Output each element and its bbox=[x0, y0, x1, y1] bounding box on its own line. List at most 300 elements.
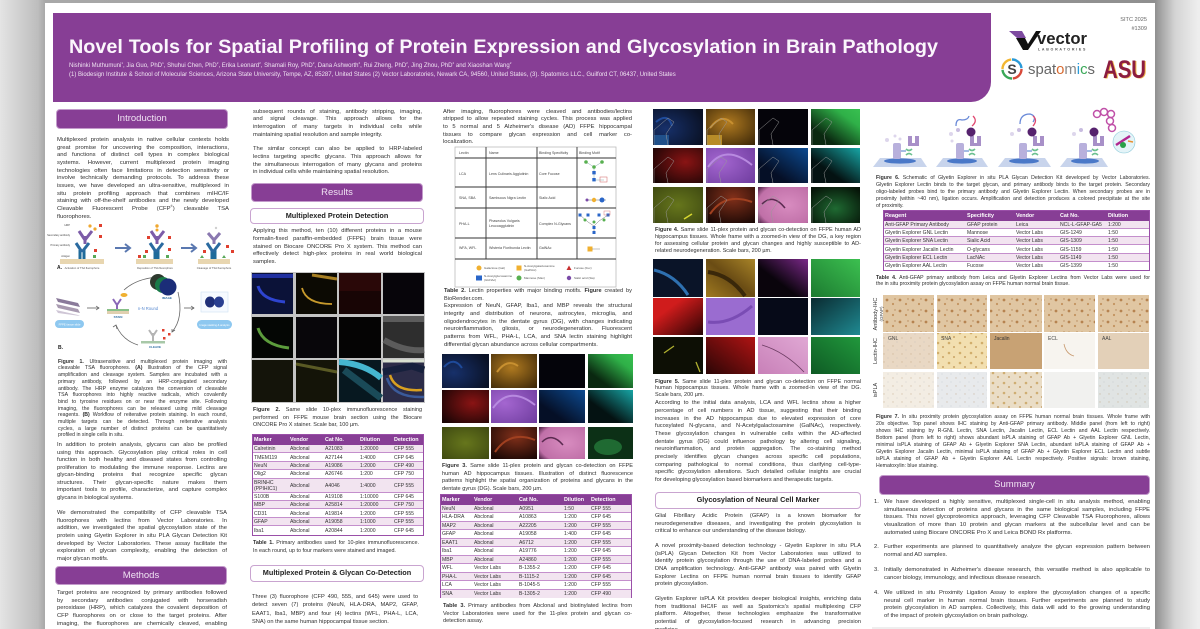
table 3: 11-plex antibodies and lectins: CFP 555 bbox=[591, 523, 611, 529]
table 4: isPLA reagents: Vector Labs bbox=[1016, 255, 1043, 261]
caption: figure 6: Glyetin Explorer Lectin binds to the target glycan, and primary antibody binds to the target protein. Secondary bbox=[876, 182, 1150, 188]
table 2: lectin properties: Sambucus Nigra Lectin bbox=[489, 196, 526, 200]
table 1: 10-plex antibodies: CFP 750 bbox=[394, 502, 414, 508]
table 2: lectin properties: Lens Culinaris Agglutinin bbox=[489, 172, 528, 176]
text: methods continued: subsequent rounds of staining, antibody stripping, imaging, bbox=[253, 108, 422, 114]
table 2: lectin properties: SNA, SBA bbox=[459, 196, 476, 200]
subheading: protein and glycan co-detection: Multiplexed Protein & Glycan Co-Detection bbox=[263, 568, 411, 577]
table 1: 10-plex antibodies: BRINHC bbox=[254, 480, 274, 486]
title: Novel Tools for Spatial Profiling of Protein Expression and Glycosylation in Brain Pathology bbox=[69, 36, 938, 58]
table 4: isPLA reagents: GIS-1309 bbox=[1060, 238, 1082, 244]
text: markers and lectins: integrity and distribution of neurons, astrocytes, microglia, and bbox=[444, 311, 632, 317]
text: introduction: issues, we have developed an ultra-sensitive, multiplexed in bbox=[57, 183, 229, 189]
caption: figure 5: human hippocampus tissues. Whole frame with a zoomed-in view of the DG. bbox=[655, 385, 861, 391]
table 1: 10-plex antibodies: NeuN bbox=[254, 463, 267, 469]
text: methods continued: and signal cleavage. This approach allows for the bbox=[253, 116, 422, 122]
caption: table 4: the in situ proximity protein glycosylation assay on FFPE human normal brain tissue. bbox=[876, 281, 1070, 287]
text: glycan profiling bbox=[57, 442, 227, 501]
row labels bbox=[873, 298, 884, 397]
summary list bbox=[874, 499, 1150, 618]
motif: SNA bbox=[586, 198, 606, 202]
table 3: 11-plex antibodies and lectins: CFP 645 bbox=[591, 531, 611, 537]
text: lectin compatibility: We demonstrated the compatibility of CFP cleavable TSA bbox=[57, 510, 227, 516]
text: data analysis: comparing pathological to normal conditions, thus clarifying cell-type- bbox=[655, 462, 861, 468]
text: co-detection: detect seven (7) proteins (NeuN, HLA-DRA, MAP2, GFAP, bbox=[252, 602, 418, 608]
table 1: 10-plex antibodies: CFP 490 bbox=[394, 463, 414, 469]
table 3: 11-plex antibodies and lectins: A22205 bbox=[519, 523, 537, 529]
table 1: 10-plex antibodies: CFP 645 bbox=[394, 455, 414, 461]
text: proximity detection: identify protein glycosylation through the use of DNA-labeled probes and a bbox=[655, 558, 861, 564]
table 1: 10-plex antibodies: S100B bbox=[254, 494, 269, 500]
table 3: 11-plex antibodies and lectins: A0951 bbox=[519, 506, 534, 512]
table 3: 11-plex antibodies and lectins: PHA-L bbox=[442, 574, 457, 580]
table 3: 11-plex antibodies and lectins: Abclonal bbox=[474, 548, 494, 554]
heading: Methods: Methods bbox=[123, 570, 159, 581]
text: glycan profiling: proliferation to modulating the immune response. Lectins are bbox=[57, 465, 227, 471]
caption: figure 5: Scale bars, 200 µm. bbox=[655, 392, 704, 398]
table 4: isPLA reagents: GIS-1149 bbox=[1060, 255, 1081, 261]
table 1: 10-plex antibodies: A27144 bbox=[325, 455, 343, 461]
stage: deposition bbox=[136, 224, 173, 270]
stain step: STAIN bbox=[114, 315, 122, 319]
summary point 2: normal and AD samples. bbox=[884, 552, 947, 558]
table 3: 11-plex antibodies and lectins: 1:200 bbox=[564, 582, 577, 588]
table 2: lectin properties: Wisteria Floribunda Lectin bbox=[489, 246, 531, 250]
n round label: n-N Round bbox=[138, 306, 159, 311]
caption: figure 1: primary antibody, followed by an HRP-conjugated secondary bbox=[58, 379, 227, 385]
table 3: 11-plex antibodies and lectins: Abclonal bbox=[474, 523, 494, 529]
text: lectin compatibility: major glycan motifs. bbox=[57, 556, 109, 562]
table 1: 10-plex antibodies: TMEM119 bbox=[254, 455, 277, 461]
summary point 3 bbox=[874, 567, 1150, 581]
table 2: lectin properties: Binding Motif bbox=[579, 151, 600, 155]
text: methods bbox=[57, 590, 227, 627]
stage: activation: Antigen bbox=[61, 254, 71, 258]
table 3: 11-plex antibodies and lectins: CFP 645 bbox=[591, 565, 611, 571]
table 4: isPLA reagents: LacNAc bbox=[967, 255, 985, 261]
table 1: 10-plex antibodies: CFP 555 bbox=[394, 446, 414, 452]
caption: figure 4: for assessing cellular protein and glycan changes and highly susceptible to AD- bbox=[655, 240, 861, 246]
text: data analysis: fucosylated N-glycans, and N-Acetylgalactosamine (GalNAc), respectively. bbox=[655, 423, 861, 429]
table 4: isPLA reagents: Mannose bbox=[967, 230, 988, 236]
text: glycan profiling: glycan-binding proteins that recognize specific glycan bbox=[57, 472, 227, 478]
text: glycan profiling: important tools to profile, characterize, and capture complex bbox=[57, 487, 227, 493]
table 1: 10-plex antibodies: Olig2 bbox=[254, 471, 266, 477]
caption: figure 7: 20x objective. Top panel shows IHC staining by Anti-GFAP primary antibody. Middle panel (from left to right) bbox=[876, 420, 1150, 426]
legend: N-Acetylglucosamine bbox=[484, 274, 513, 278]
logo: Spatomics: spatomics bbox=[1028, 61, 1095, 78]
image step: IMAGE bbox=[162, 296, 172, 300]
table 1: 10-plex antibodies: Abclonal bbox=[290, 502, 310, 508]
text: proximity detection: (isPLA) Glycan Detection Kit from Vector Laboratories was utilized to bbox=[655, 551, 861, 557]
table 2: lectin properties: WFA, WFL bbox=[459, 246, 476, 250]
affiliations: (1) Biodesign Institute & School of Molecular Sciences, Arizona State University, Tempe, AZ, 85287, United States (2) Vector Laboratories, Newark CA, 94560, United States, (3). Spatomics LLC., Guilford CT, 06437, United States bbox=[69, 72, 676, 78]
table 1: 10-plex antibodies: A19814 bbox=[325, 511, 343, 517]
table 4: isPLA reagents: 1:50 bbox=[1108, 247, 1118, 253]
subheading: protein and glycan co-detection bbox=[250, 565, 424, 582]
text: lectin compatibility: developed by Vector Laboratories. These assay facilitate the bbox=[57, 541, 227, 547]
text: co-detection continued: tissues to compare glycan expression and cell marker co- bbox=[443, 132, 632, 138]
table 1: 10-plex antibodies: 1:200 bbox=[360, 471, 373, 477]
table 3: 11-plex antibodies and lectins: WFL bbox=[442, 565, 453, 571]
heading: Summary bbox=[879, 475, 1150, 495]
summary point 4: We utilized in situ Proximity Ligation Assay to explore the glycosylation changes of a specific bbox=[884, 590, 1150, 596]
text: proximity detection bbox=[655, 543, 862, 587]
table 1: 10-plex antibodies: 1:10000 bbox=[360, 494, 378, 500]
summary point 2: Further experiments are planned to quantitatively analyze the glycan expression pattern between bbox=[884, 544, 1150, 550]
table 4: isPLA reagents: Glyetin Explorer ECL Lectin bbox=[885, 255, 947, 261]
table 4: isPLA reagents bbox=[883, 210, 1150, 271]
text: glycan profiling: using this approach. Glycosylation play critical roles in cell bbox=[57, 450, 227, 456]
table 1: 10-plex antibodies: 1:4000 bbox=[360, 483, 376, 489]
text: data analysis: According to the initial data analysis, LCA and WFL lectins show a higher bbox=[655, 400, 861, 406]
text: glycan profiling: In addition to protein analysis, glycans can also be profiled bbox=[57, 442, 227, 448]
text: data analysis: neuroinflammation, and protein aggregation. The co-staining method bbox=[655, 446, 861, 452]
pill: FFPE tissue: FFPE tissue slide bbox=[59, 322, 81, 326]
arrow bbox=[184, 306, 194, 310]
authors: Nishinki Muthumuni1 , Jia Guo, PhD1 , Shuhui Chen, PhD2 , Erika Leonard2 , Shamali Roy, PhD2 , Dana Ashworth2 , Rui Zheng, PhD2 , Jing Zhou, PhD2 and Xiaoshan Wang2 bbox=[69, 61, 511, 69]
table 3: 11-plex antibodies and lectins: Dilution bbox=[564, 497, 584, 503]
text: co-detection: Three (3) fluorophore (CFP 490, 555, and 645) were used to bbox=[252, 594, 418, 600]
caption: figure 1: cycles, a large number of distinct proteins can be quantitatively bbox=[58, 426, 227, 432]
table 1: 10-plex antibodies: Abclonal bbox=[290, 528, 310, 534]
table 1: 10-plex antibodies: Cat No. bbox=[325, 437, 344, 443]
table 3: 11-plex antibodies and lectins: CFP 555 bbox=[591, 582, 611, 588]
table 3: 11-plex antibodies and lectins: EAAT1 bbox=[442, 540, 458, 546]
table 3: 11-plex antibodies and lectins: 1:200 bbox=[564, 523, 577, 529]
summary point 1: automated using Biocare ONCORE Pro X and Leica BOND Rx platforms. bbox=[884, 530, 1072, 536]
caption: figure 2: ONCORE Pro X stainer. Scale bar, 100 µm. bbox=[253, 422, 359, 428]
table 4: isPLA reagents: 1:50 bbox=[1108, 230, 1118, 236]
text: lectin compatibility: addition, we investigated the spatial glycosylation state of the bbox=[57, 525, 227, 531]
caption: figure 7: minimal isPLA staining of GFAP Ab + Glyetin Explorer SNA Lectin, abundant isPLA staining of GFAP Ab + bbox=[876, 442, 1150, 448]
table 3: 11-plex antibodies and lectins: CFP 555 bbox=[591, 540, 611, 546]
text: protein detection bbox=[253, 228, 422, 265]
table 4: isPLA reagents: Vector Labs bbox=[1016, 230, 1043, 236]
table 3: 11-plex antibodies and lectins: 1:200 bbox=[564, 591, 577, 597]
text: protein detection: samples. bbox=[253, 259, 276, 265]
table 3: 11-plex antibodies and lectins: 1:200 bbox=[564, 557, 577, 563]
summary point 1: tissues. This novel glycoproteomics approach, leveraging CFP Cleavable TSA Fluorophores, allows bbox=[884, 514, 1150, 520]
table 3: 11-plex antibodies and lectins: SNA bbox=[442, 591, 452, 597]
table 3: 11-plex antibodies and lectins: Detection bbox=[591, 497, 616, 503]
summary point 4: protein glycosylation in AD samples. Collectively, this data will add to the growing understanding bbox=[884, 605, 1150, 611]
table 1: 10-plex antibodies: CFP 555 bbox=[394, 519, 414, 525]
table 3: 11-plex antibodies and lectins: Cat No. bbox=[519, 497, 538, 503]
text: protein detection: effectively detect high-plex proteins in real world biological bbox=[253, 251, 422, 257]
tissue slides bbox=[56, 298, 80, 316]
poster number: #1309 bbox=[1131, 26, 1147, 32]
caption: figure 7 bbox=[876, 414, 1150, 468]
table 3: 11-plex antibodies and lectins: A10863 bbox=[519, 514, 537, 520]
table 2: lectin properties: Name bbox=[489, 151, 499, 155]
stage: cleavage bbox=[197, 227, 234, 270]
table 3: 11-plex antibodies and lectins: Vector Labs bbox=[474, 591, 501, 597]
text: isPLA insights: potential of glycosylation-focused research in advancing precision bbox=[655, 619, 861, 625]
table 3: 11-plex antibodies and lectins: Abclonal bbox=[474, 557, 494, 563]
table 2: lectin properties: PHA-L bbox=[459, 222, 470, 226]
table 2: lectin properties: Sialic Acid bbox=[539, 196, 555, 200]
table 1: 10-plex antibodies: CFP 750 bbox=[394, 471, 414, 477]
text: co-detection bbox=[252, 594, 418, 625]
text: isPLA insights bbox=[655, 596, 862, 629]
table 3: 11-plex antibodies and lectins: A19776 bbox=[519, 548, 537, 554]
text: co-detection continued bbox=[443, 109, 632, 145]
motif: WFL bbox=[588, 246, 600, 252]
figure 7: IHC and isPLA image grid bbox=[873, 295, 1149, 408]
table 2: lectin properties: Phaseolus Vulgaris bbox=[489, 219, 520, 223]
stage: activation: Secondary antibody bbox=[47, 233, 71, 237]
table 3: 11-plex antibodies and lectins: Abclonal bbox=[474, 506, 494, 512]
summary list: 2. bbox=[874, 544, 879, 550]
table 4: isPLA reagents: Vendor bbox=[1016, 213, 1034, 219]
caption: table 2: BioRender.com. bbox=[444, 296, 484, 302]
table 3: 11-plex antibodies and lectins: Marker bbox=[442, 497, 460, 503]
text: methods: peroxidase (HRP), which catalyzes the covalent deposition of bbox=[57, 605, 227, 611]
text: markers and lectins: differential glycan abundance across cellular compartments. bbox=[444, 342, 598, 348]
text: co-detection: EAAT1, Iba1, MBP) and four (4) lectins (WFL, PHA-L, LCA, bbox=[252, 611, 418, 617]
text: methods: by secondary antibodies conjugated with horseradish bbox=[57, 598, 227, 604]
row: lectin IHC bbox=[883, 333, 1149, 369]
table 1: 10-plex antibodies: A20844 bbox=[325, 528, 343, 534]
table 1: 10-plex antibodies: 1:20000 bbox=[360, 446, 378, 452]
caption: figure 7: Glyetin Explorer Jacalin Lectin, minimal isPLA staining of GFAP Ab + Glyetin Explorer ECL Lectin and subtle bbox=[876, 448, 1150, 454]
caption: table 2 bbox=[444, 288, 632, 302]
table 3: 11-plex antibodies and lectins: CFP 555 bbox=[591, 506, 611, 512]
table 1: 10-plex antibodies: 1:4000 bbox=[360, 455, 376, 461]
logo: Spatomics: S bbox=[1007, 61, 1017, 77]
table 4: isPLA reagents: NCL-L-GFAP-GA5 bbox=[1060, 222, 1102, 228]
text: methods continued bbox=[253, 108, 422, 138]
summary point 4 bbox=[874, 590, 1150, 618]
table 4: isPLA reagents: Glyetin Explorer AAL Lectin bbox=[885, 263, 947, 269]
table 3: 11-plex antibodies and lectins: Vector Labs bbox=[474, 565, 501, 571]
table 2: lectin properties: Core Fucose bbox=[539, 172, 560, 176]
caption: figure 6 bbox=[876, 174, 1150, 208]
text: introduction: staining with off-the-shelf antibodies and the newly developed bbox=[57, 198, 229, 204]
text: methods: Target proteins are recognized by primary antibodies followed bbox=[57, 590, 227, 596]
text: methods continued: interrogation of many targets in individual cells while bbox=[253, 124, 422, 130]
subheading: glycosylation of neural cell marker: Glycosylation of Neural Cell Marker bbox=[697, 495, 819, 504]
pill: image stacking bbox=[197, 320, 232, 329]
text: glycan profiling: structures. Their glycan-specific nature makes them bbox=[57, 480, 227, 486]
table 3: 11-plex antibodies and lectins: A24860 bbox=[519, 557, 537, 563]
logo: Vector Laboratories: vector bbox=[1037, 29, 1087, 48]
table 1: 10-plex antibodies: MBP bbox=[254, 502, 265, 508]
text: markers and lectins: Expression of NeuN, GFAP, Iba1, and MBP reveals the structural bbox=[444, 303, 632, 309]
table 4: isPLA reagents: Vector Labs bbox=[1016, 263, 1043, 269]
table 3: 11-plex antibodies and lectins: 1:200 bbox=[564, 565, 577, 571]
caption: figure 7: shows IHC staining by R-GNL Lectin, SNA Lectin, Jacalin Lectin, ECL Lectin and AAL Lectin respectively. bbox=[876, 428, 1150, 434]
table 4: isPLA reagents: GIS-1159 bbox=[1060, 247, 1081, 253]
text: introduction: fluorophores. bbox=[57, 214, 91, 220]
table 3: 11-plex antibodies and lectins: Abclonal bbox=[474, 531, 494, 537]
caption: figure 3: human AD hippocampus tissues. Illustration of distinct fluorescence bbox=[442, 471, 633, 477]
text: lectin concept: the simultaneous interrogation of many glycans and proteins bbox=[253, 162, 422, 168]
table 1: 10-plex antibodies bbox=[252, 434, 424, 536]
text: lectin concept bbox=[253, 146, 422, 175]
table 4: isPLA reagents: Leica bbox=[1016, 222, 1028, 228]
text: proximity detection: Explorer Lectins on FFPE human normal brain tissues to identify GFAP bbox=[655, 574, 861, 580]
subheading: glycosylation of neural cell marker bbox=[655, 492, 861, 509]
arrow bbox=[87, 306, 99, 310]
cycle arrows bbox=[113, 276, 180, 345]
text: lectin compatibility: exploration of glycan complexity, enabling the detection of bbox=[57, 548, 227, 554]
caption: table 3: Table 3. Primary antibodies from Abclonal and biotinylated lectins from bbox=[443, 603, 632, 609]
text: lectin concept: lectins targeting specific glycans. This approach allows for bbox=[253, 154, 422, 160]
table 2: lectin properties: Lectin bbox=[459, 151, 469, 155]
table 1: 10-plex antibodies: Vendor bbox=[290, 437, 308, 443]
text: co-detection: SNA) on the same human hippocampal tissue section. bbox=[252, 619, 389, 625]
table 1: 10-plex antibodies: 1:2000 bbox=[360, 528, 376, 534]
text: glycan profiling: function in both healthy and diseased states from controlling bbox=[57, 457, 227, 463]
table 3: 11-plex antibodies and lectins: 1:200 bbox=[564, 540, 577, 546]
heading: Results bbox=[251, 183, 423, 202]
table 3: 11-plex antibodies and lectins: CFP 645 bbox=[591, 574, 611, 580]
table 3: 11-plex antibodies and lectins: A19058 bbox=[519, 531, 537, 537]
caption: figure 5: Figure 5. Same slide 11-plex protein and glycan co-detection on FFPE normal bbox=[655, 378, 861, 384]
table 4: isPLA reagents: Anti-GFAP Primary Antibody bbox=[885, 222, 949, 228]
table 3: 11-plex antibodies and lectins: Abclonal bbox=[474, 514, 494, 520]
text: methods: CFP fluorophores on or close to the target proteins. After bbox=[57, 613, 227, 619]
figure 6: in situ PLA schematic bbox=[873, 108, 1135, 167]
legend: Galactose (Gal) bbox=[484, 266, 505, 270]
caption: figure 4: Figure 4. Same slide 11-plex protein and glycan co-detection on FFPE human AD bbox=[655, 226, 861, 232]
table 3: 11-plex antibodies and lectins: CFP 555 bbox=[591, 557, 611, 563]
text: data analysis: increases in the AD hippocampus due to elevated expression of core bbox=[655, 416, 861, 422]
text: data analysis: for developing glycosylation based biomarkers and therapeutic targets. bbox=[655, 477, 833, 483]
table 3: 11-plex antibodies and lectins: Abclonal bbox=[474, 540, 494, 546]
table 1: 10-plex antibodies: CFP 555 bbox=[394, 511, 414, 517]
table 2: lectin properties: GalNAc bbox=[539, 246, 552, 250]
table 3: 11-plex antibodies and lectins: 1:400 bbox=[564, 531, 577, 537]
table 3: 11-plex antibodies and lectins: CFP 645 bbox=[591, 548, 611, 554]
caption: table 1: Table 1. Primary antibodies used for 10-plex immunofluorescence. bbox=[253, 540, 419, 546]
row: lectin IHC: SNA bbox=[941, 336, 952, 342]
row: lectin IHC: AAL bbox=[1102, 336, 1112, 342]
table 3: 11-plex antibodies and lectins: NeuN bbox=[442, 506, 455, 512]
caption: table 3 bbox=[443, 603, 632, 624]
subheading: multiplexed protein detection: Multiplexed Protein Detection bbox=[286, 211, 388, 220]
figure 1A: signal amplification schematic bbox=[47, 223, 234, 271]
cleave step: CLEAVE bbox=[149, 345, 161, 349]
table 1: 10-plex antibodies: CFP 645 bbox=[394, 494, 414, 500]
logo: Vector Laboratories: LABORATORIES bbox=[1038, 48, 1086, 52]
table 4: isPLA reagents: Fucose bbox=[967, 263, 984, 269]
caption: figure 1: TSA fluorophores into highly reactive radicals, which covalently bbox=[58, 392, 227, 398]
figure 2: 10-plex immunofluorescence grid bbox=[251, 272, 425, 403]
table 1: 10-plex antibodies: A19086 bbox=[325, 463, 343, 469]
stage 2 bbox=[936, 116, 988, 167]
table 1: 10-plex antibodies: Abclonal bbox=[290, 483, 310, 489]
stage: activation: HRP bbox=[65, 223, 70, 227]
table 4: isPLA reagents: GIS-1399 bbox=[1060, 263, 1082, 269]
table 3: 11-plex antibodies and lectins: Vector Labs bbox=[474, 582, 501, 588]
logo: ASU: ASU bbox=[1104, 56, 1147, 84]
text: glycan profiling: glycans in biological systems. bbox=[57, 495, 133, 501]
text: isPLA insights: platform. Altogether, these technologies emphasize the transformative bbox=[655, 611, 861, 617]
table 1: 10-plex antibodies: 1:20000 bbox=[360, 502, 378, 508]
text: GFAP background bbox=[655, 513, 861, 534]
text: lectin concept: in individual cells while maintaining spatial resolution. bbox=[253, 169, 389, 175]
table 1: 10-plex antibodies: A26746 bbox=[325, 471, 343, 477]
heading: Results: Results bbox=[321, 187, 353, 198]
table 3: 11-plex antibodies and lectins: Vendor bbox=[474, 497, 492, 503]
table 1: 10-plex antibodies: CD31 bbox=[254, 511, 267, 517]
table 1: 10-plex antibodies: A4046 bbox=[325, 483, 340, 489]
stage: cleavage: Cleavage of TSA fluorophore bbox=[197, 266, 232, 270]
text: data analysis: percentage of cell numbers in AD tissue, suggesting that their binding bbox=[655, 408, 861, 414]
caption: figure 1: antibody. The HRP enzyme catalyzes the conversion of cleavable bbox=[58, 386, 227, 392]
logo: ASU: ASU bbox=[1103, 56, 1146, 84]
table 4: isPLA reagents: 1:50 bbox=[1108, 255, 1118, 261]
stage 4 bbox=[1060, 108, 1135, 167]
caption: figure 1: cleavable TSA fluorophores. (A) Illustration of the CFP signal bbox=[58, 365, 227, 371]
table 4: isPLA reagents: Specificity bbox=[967, 213, 994, 219]
table 4: isPLA reagents: 1:50 bbox=[1108, 238, 1118, 244]
pill: image stacking: Image stacking & analysis bbox=[200, 323, 230, 327]
table 1: 10-plex antibodies: Abclonal bbox=[290, 519, 310, 525]
text: co-detection continued: localization. bbox=[443, 139, 473, 145]
arrow bbox=[115, 244, 130, 252]
text: data analysis bbox=[655, 400, 861, 483]
table 3: 11-plex antibodies and lectins: 1:200 bbox=[564, 548, 577, 554]
stage: activation: Activation of TSA fluorophore bbox=[65, 266, 100, 270]
summary point 1: simultaneous detection of proteins and glycans in the same biological samples, including FFPE bbox=[884, 507, 1150, 513]
caption: figure 1: Figure 1. Ultrasensitive and multiplexed protein imaging with bbox=[58, 359, 227, 365]
text: protein detection: stained on Biocare ONCORE Pro X system. This method can bbox=[253, 244, 422, 250]
row: lectin IHC: GNL bbox=[888, 336, 898, 342]
text: markers and lectins: oligodendrocytes in the dentate gyrus (DG), with changes indicating bbox=[444, 319, 632, 325]
text: GFAP background: critical to enhance our understanding of the disease biology. bbox=[655, 528, 806, 534]
logo: Vector Laboratories bbox=[1009, 29, 1087, 52]
caption: table 3: Vector Laboratories were used for the 11-plex protein and glycan co- bbox=[443, 611, 632, 617]
caption: table 4 bbox=[876, 275, 1150, 287]
legend: Fucose (Fuc) bbox=[574, 266, 592, 270]
stage: activation bbox=[47, 223, 104, 270]
text: protein detection: formalin-fixed paraffin-embedded (FFPE) brain tissue were bbox=[253, 236, 422, 242]
summary point 4: neural cell marker in human normal brain tissues. Further experiments are planned to study bbox=[884, 598, 1150, 604]
text: markers and lectins bbox=[444, 303, 632, 348]
text: methods continued: maintaining spatial resolution and sample integrity. bbox=[253, 132, 382, 138]
poster number: SITC 2025 bbox=[1120, 17, 1147, 23]
caption: figure 7: Hematoxylin: blue staining. bbox=[876, 462, 938, 468]
text: data analysis: dentate gyrus (DG) could influence pathology by altering cell signaling, bbox=[655, 439, 861, 445]
table 1: 10-plex antibodies: Marker bbox=[254, 437, 272, 443]
summary point 4: of the impact of protein glycosylation on brain pathology. bbox=[884, 612, 1028, 618]
table 4: isPLA reagents: Glyetin Explorer GNL Lectin bbox=[885, 230, 948, 236]
text: methods: imaging, the fluorophores are chemically cleaved, enabling bbox=[57, 621, 227, 627]
text: introduction: situ protein profiling approach that combines mIHC/IF bbox=[57, 191, 229, 197]
legend bbox=[476, 264, 595, 282]
caption: figure 6: Figure 6. Schematic of Glyetin Explorer in situ PLA Glycan Detection Kit developed by Vector Laboratories. bbox=[876, 174, 1150, 180]
text: GFAP background: Glial Fibrillary Acidic Protein (GFAP) is a known biomarker for bbox=[655, 513, 861, 519]
text: proximity detection: DNA amplification technology. Anti-GFAP antibody was paired with Glyetin bbox=[655, 566, 861, 572]
table 2: lectin properties: Binding Specificity bbox=[539, 151, 568, 155]
row labels: (GFAP) bbox=[879, 306, 884, 322]
table 4: isPLA reagents: Cat No. bbox=[1060, 213, 1079, 219]
caption: table 1: In each round, up to four markers were stained and imaged. bbox=[253, 548, 396, 554]
figure 5: normal hippocampus grid bbox=[653, 259, 860, 374]
summary point 1: visualization of more than 10 protein and glycan markers at the subcellular level and can be bbox=[884, 522, 1150, 528]
text: proximity detection: protein glycosylation. bbox=[655, 581, 708, 587]
caption: figure 7: isPLA staining of GFAP Ab + Glyetin Explorer AAL Lectin respectively. Positive signals: brown staining, bbox=[876, 456, 1150, 462]
image step bbox=[150, 274, 176, 300]
table 1: 10-plex antibodies: Detection bbox=[394, 437, 419, 443]
poster number bbox=[1120, 17, 1147, 32]
table 3: 11-plex antibodies and lectins: Vector Labs bbox=[474, 574, 501, 580]
text: co-detection continued: After imaging, fluorophores were cleaved and antibodies/lectins bbox=[443, 109, 632, 115]
